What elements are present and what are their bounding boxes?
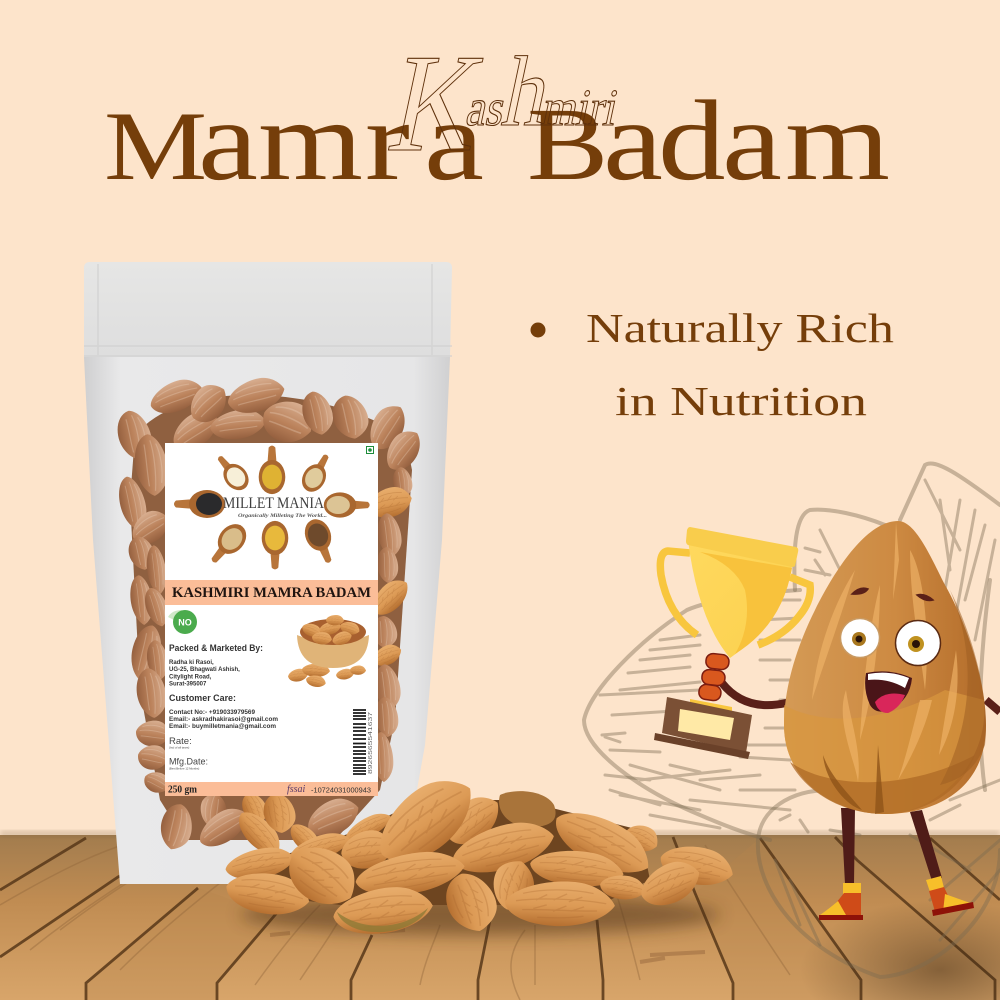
- wooden floor: [0, 831, 1000, 1000]
- title: m: [785, 77, 890, 205]
- script word: K: [378, 27, 497, 181]
- trophy grip beads: [698, 653, 730, 701]
- bottom weight band: 250 gm: [168, 784, 197, 796]
- brand logo text: MILLET MANIA: [223, 495, 325, 512]
- title: m: [258, 77, 363, 205]
- right arm: [986, 700, 1000, 712]
- trophy: [654, 527, 810, 759]
- packed and marketed by: UG-25, Bhagwati Ashish,: [169, 667, 240, 673]
- left shoe: [819, 883, 863, 920]
- customer care: [169, 693, 278, 730]
- script word: as: [462, 78, 511, 137]
- brand logo text: [223, 495, 327, 519]
- title: [104, 27, 890, 205]
- packed and marketed by: Surat-395007: [169, 682, 207, 688]
- rate and date: (Best Before 12 Months): [169, 766, 199, 770]
- bottom weight band: [165, 782, 378, 796]
- customer care: Email:- buymilletmania@gmail.com: [169, 724, 276, 730]
- script word: hmiri: [495, 37, 624, 147]
- eyebrows: [852, 588, 933, 600]
- spoons logo ring: [174, 446, 370, 570]
- rate and date: Mfg.Date:: [169, 756, 208, 766]
- benefit bullet text: [530, 306, 894, 424]
- rate and date: (Incl of all taxes): [169, 746, 189, 750]
- title: d: [658, 77, 725, 205]
- title: a: [198, 77, 258, 205]
- packed and marketed by: Radha ki Rasoi,: [169, 660, 214, 666]
- title: a: [722, 77, 782, 205]
- customer care: Email:- askradhakirasoi@gmail.com: [169, 717, 278, 723]
- bottom weight band: -10724031000943: [311, 788, 371, 794]
- product label: [165, 443, 378, 796]
- body streaks: [812, 522, 958, 782]
- rate and date: [169, 736, 208, 770]
- benefit bullet text: in Nutrition: [615, 379, 867, 424]
- brand logo text: Organically Milleting The World...: [238, 513, 327, 519]
- almond pile: [223, 765, 737, 937]
- packed and marketed by: Packed & Marketed By:: [169, 643, 263, 653]
- product pouch: [84, 262, 452, 884]
- title: a: [424, 77, 484, 205]
- legs: [841, 808, 942, 884]
- almond mascot holding trophy: [654, 521, 1000, 920]
- title: M: [104, 92, 207, 201]
- title: a: [603, 77, 663, 205]
- veg mark: [366, 446, 374, 454]
- barcode: [353, 710, 374, 774]
- title: r: [365, 77, 410, 205]
- product name band: KASHMIRI MAMRA BADAM: [172, 585, 371, 601]
- title: B: [527, 87, 608, 202]
- almond body: [784, 521, 986, 814]
- no preservatives badge: NO: [178, 618, 192, 628]
- customer care: Customer Care:: [169, 693, 236, 704]
- left arm: [722, 683, 786, 705]
- eyes: [840, 618, 880, 658]
- bowl of almonds: [288, 614, 369, 689]
- mouth: [865, 671, 912, 712]
- product name band: [165, 580, 378, 605]
- zip seal lines: [84, 264, 452, 356]
- no preservatives badge: [168, 610, 197, 634]
- customer care: Contact No:- +919033979569: [169, 710, 256, 716]
- barcode: 8926565541637: [368, 712, 374, 774]
- bottom weight band: fssai: [287, 784, 306, 795]
- line art: background almond sketches: [584, 463, 1000, 977]
- pouch almonds: [114, 374, 429, 863]
- packed and marketed by: Citylight Road,: [169, 674, 212, 680]
- rate and date: Rate:: [169, 736, 192, 747]
- benefit bullet text: Naturally Rich: [586, 306, 894, 352]
- right shoe: [926, 876, 974, 916]
- packed and marketed by: [169, 643, 263, 688]
